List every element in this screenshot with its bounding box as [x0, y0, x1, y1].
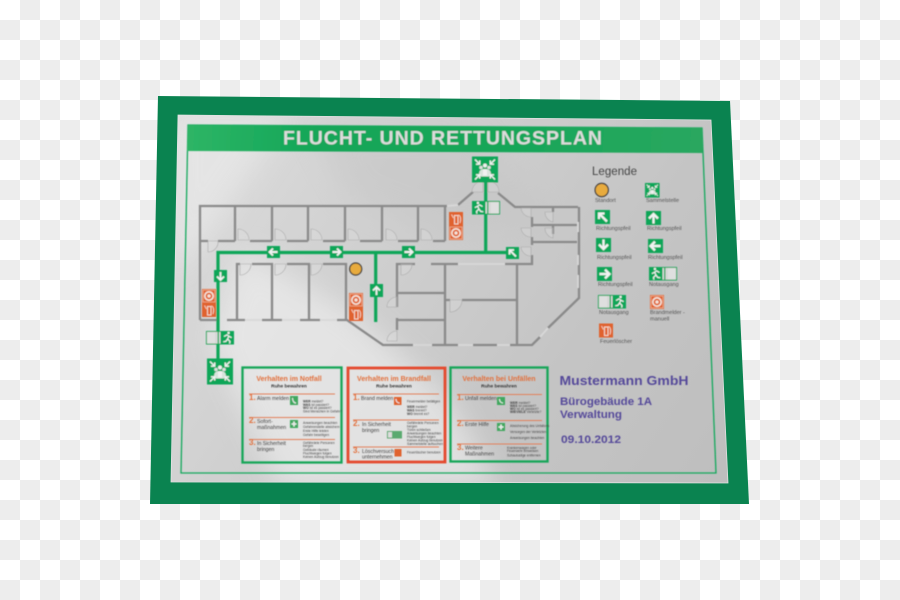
steps: Sofort- — [257, 419, 273, 425]
fire equipment: left — [202, 289, 216, 317]
instructions: Versorgen der Verletzten — [510, 430, 546, 434]
steps: unternehmen — [362, 454, 393, 460]
separators — [457, 394, 542, 444]
instructions: Fluchtwegen folgen — [407, 435, 436, 439]
department: Verwaltung — [560, 409, 622, 421]
legend: exit right: Notausgang — [599, 310, 629, 316]
instructions: Schaulustige entfernen — [507, 454, 541, 458]
panel: fire conduct — [348, 368, 445, 462]
legend: Standort — [595, 183, 616, 204]
instructions: Feuerlöscher benutzen — [407, 450, 441, 454]
location marker — [350, 263, 362, 275]
instructions — [407, 400, 443, 454]
legend: Sammelstelle — [645, 183, 679, 204]
assembly point: top — [472, 156, 498, 182]
legend: fire alarm: manuell — [650, 316, 669, 322]
instructions: Sammelstelle aufsuchen — [407, 442, 443, 446]
steps: Brand melden — [361, 396, 393, 402]
legend: arrow up: Richtungspfeil — [647, 226, 682, 232]
legend — [592, 166, 685, 345]
instructions: Keinen Aufzug benutzen — [303, 455, 339, 459]
legend: fire alarm — [650, 295, 685, 322]
instructions: Krankenwagen oder — [507, 446, 537, 450]
legend: arrow up-left: Richtungspfeil — [596, 226, 631, 232]
legend: extinguisher: Feuerlöscher — [600, 339, 632, 345]
door swings — [208, 181, 553, 341]
instructions: Absicherung des Unfallorts — [510, 424, 550, 428]
instructions: Anweisungen beachten — [510, 436, 544, 440]
steps: In Sicherheit — [362, 422, 391, 428]
legend: arrow down: Richtungspfeil — [597, 255, 632, 261]
glass wall sections — [245, 205, 578, 345]
legend: arrow down — [596, 238, 632, 261]
legend: arrow right: Richtungspfeil — [598, 282, 633, 288]
icon: first aid — [497, 423, 505, 431]
panel heading: Verhalten im Notfall — [256, 376, 322, 383]
title band — [187, 125, 703, 153]
steps: maßnahmen — [257, 425, 286, 431]
company name: Mustermann GmbH — [560, 373, 688, 388]
instructions: WER meldet? — [510, 401, 531, 405]
steps: Maßnahmen — [465, 452, 494, 458]
steps: bringen — [362, 428, 379, 434]
instructions: Erste Hilfe leisten — [303, 429, 329, 433]
instructions: WER meldet? — [407, 405, 428, 409]
legend: exit left: Notausgang — [649, 282, 679, 288]
steps: 2. — [249, 416, 256, 425]
instructions: WO ist es passiert? — [510, 407, 539, 411]
instructions: Fluchtwegen folgen — [303, 452, 332, 456]
icon: extinguisher — [394, 449, 402, 456]
instructions: Anweisungen beachten — [407, 432, 441, 436]
steps: bringen — [257, 447, 274, 453]
steps: In Sicherheit — [257, 441, 286, 447]
panel: silver board — [170, 115, 728, 490]
panel heading: Verhalten bei Unfällen — [462, 376, 536, 383]
company block — [560, 373, 688, 446]
building: Bürogebäude 1A — [560, 396, 652, 408]
instructions: Feuerwehr einweisen — [507, 449, 539, 453]
instructions — [507, 401, 550, 458]
steps: Weitere — [465, 446, 483, 452]
instructions: Feuermelder betätigen — [407, 400, 440, 404]
panel: accident conduct — [450, 368, 550, 462]
steps: 2. — [353, 419, 360, 428]
steps — [457, 393, 497, 458]
instructions: WIEVIELE Verletzte? — [510, 410, 542, 414]
exit sign: bottom — [206, 331, 234, 344]
arrow sign: right 1 — [330, 246, 343, 258]
panel subheading: Ruhe bewahren — [376, 384, 412, 390]
fire equipment: centre — [349, 293, 363, 321]
legend: arrow left: Richtungspfeil — [648, 255, 683, 261]
assembly point: bottom — [207, 358, 233, 384]
steps — [353, 393, 394, 460]
date: 09.10.2012 — [561, 434, 621, 446]
instructions: Türen schließen — [407, 428, 431, 432]
panel heading: Verhalten im Brandfall — [357, 376, 431, 383]
instructions: WO brennt es? — [407, 412, 429, 416]
steps: 2. — [457, 419, 464, 428]
floor plan walls — [200, 192, 579, 345]
instructions: Gefahrenstelle absichern — [303, 425, 340, 429]
instructions: Keinen Aufzug benutzen — [407, 438, 443, 442]
instructions: WAS brennt? — [407, 408, 427, 412]
panel subheading: Ruhe bewahren — [481, 384, 517, 390]
steps: 1. — [457, 393, 464, 402]
legend: arrow right — [597, 267, 633, 288]
steps: Erste Hilfe — [465, 422, 489, 428]
legend: fire alarm: Brandmelder - — [650, 310, 685, 316]
title: FLUCHT- UND RETTUNGSPLAN — [283, 128, 602, 150]
icon: first aid — [290, 420, 298, 428]
legend: arrow left — [648, 239, 683, 261]
steps: 3. — [457, 443, 464, 452]
instructions: bergen — [303, 444, 313, 448]
icon: phone — [290, 396, 298, 405]
instructions: WAS ist passiert? — [303, 403, 329, 407]
panel: emergency conduct — [242, 368, 342, 462]
icon: exit — [387, 431, 402, 438]
instructions: Gefährdete Personen — [303, 441, 335, 445]
icon: phone — [497, 397, 505, 405]
steps: 3. — [353, 446, 360, 455]
panel subheading: Ruhe bewahren — [271, 384, 307, 390]
legend: Standort: Standort — [595, 198, 616, 204]
legend: arrow up-left — [595, 210, 631, 232]
legend: extinguisher — [599, 324, 632, 345]
instructions: Sind Menschen in Gefahr? — [303, 409, 342, 413]
frame: green poster frame — [150, 96, 749, 504]
arrow sign: right 2 — [402, 246, 415, 258]
steps: Unfall melden — [465, 396, 497, 402]
instructions: WO ist es passiert? — [303, 406, 332, 410]
steps: 3. — [249, 438, 256, 447]
instructions: WAS ist passiert? — [510, 404, 536, 408]
instructions — [303, 400, 342, 459]
steps: 1. — [249, 393, 256, 402]
separators — [353, 394, 439, 447]
legend: Sammelstelle: Sammelstelle — [646, 198, 679, 204]
steps: Alarm melden — [257, 396, 289, 402]
legend: exit left — [649, 267, 679, 288]
instructions: Gefährdete Personen — [407, 421, 439, 425]
arrow sign: left — [267, 246, 280, 258]
legend heading: Legende — [592, 166, 637, 178]
legend: arrow up — [646, 211, 682, 232]
steps: 1. — [353, 393, 360, 402]
arrow sign: up-left — [506, 247, 519, 259]
icon: fire phone — [394, 397, 402, 405]
instructions: WER meldet? — [303, 400, 324, 404]
instructions: Gefahr beseitigen — [303, 433, 329, 437]
inner green border — [181, 125, 716, 473]
board content — [181, 125, 716, 473]
steps: Löschversuch — [362, 449, 394, 455]
arrow sign: down — [214, 270, 227, 282]
escape routes — [218, 180, 506, 360]
exit sign: top — [472, 201, 500, 214]
instructions: bergen — [407, 424, 417, 428]
steps — [249, 393, 289, 453]
arrow sign: up — [370, 284, 383, 297]
fire equipment: top — [449, 212, 463, 240]
instructions: Anweisungen beachten — [303, 421, 337, 425]
separators — [249, 394, 335, 440]
legend: exit right — [598, 295, 629, 316]
instructions: Gebäude räumen — [303, 448, 329, 452]
